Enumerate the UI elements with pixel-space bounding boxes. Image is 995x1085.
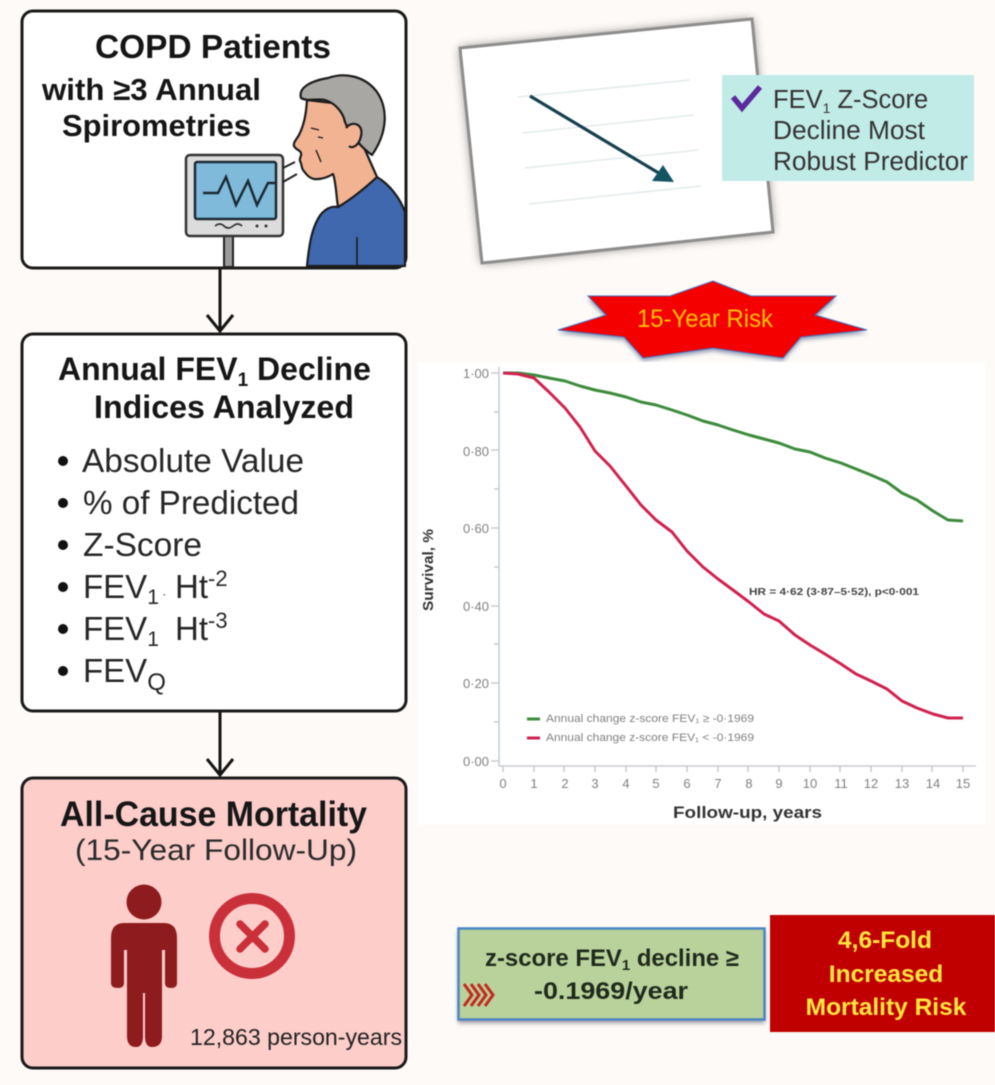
icon: red chevrons <box>464 984 493 1006</box>
text: threshold: 1 <box>622 957 630 974</box>
x-axis labels: 9 <box>775 776 783 791</box>
line: green survival curve <box>503 373 963 521</box>
list: indices: Q <box>147 669 166 696</box>
x-axis labels: 3 <box>591 776 599 791</box>
text: predictor: Z-Score <box>830 86 928 114</box>
list: indices: -3 <box>208 608 228 633</box>
callout: z-score threshold <box>458 928 765 1023</box>
x-axis labels: 15 <box>956 776 970 791</box>
arrow: decline trend <box>530 96 674 182</box>
subheading: follow-up: (15-Year Follow-Up) <box>75 834 357 867</box>
y-axis labels: 0·20 <box>463 676 489 691</box>
x-axis labels: 10 <box>803 776 817 791</box>
annotation: hazard ratio: HR = 4·62 (3·87–5·52), p<0·001 <box>749 586 919 598</box>
heading: decline indices: Decline <box>248 351 371 387</box>
heading: all-cause mortality: All-Cause Mortality <box>60 795 368 834</box>
heading: COPD patients <box>41 28 331 143</box>
text: predictor <box>773 86 969 176</box>
legend: Annual change z-score FEV₁ < -0·1969 <box>546 732 754 744</box>
x-axis labels: 14 <box>926 776 940 791</box>
legend <box>527 713 754 744</box>
callout: increased mortality risk: Mortality Risk <box>806 994 967 1021</box>
x-axis labels: 4 <box>622 776 630 791</box>
list: indices: -2 <box>208 566 228 591</box>
callout: increased mortality risk: Increased <box>829 961 943 988</box>
list: indices: Ht <box>175 610 208 647</box>
text: threshold: -0.1969/year <box>534 978 688 1005</box>
heading: decline indices <box>58 351 371 425</box>
panel: annual FEV1 decline indices <box>22 334 406 711</box>
text: predictor: Decline Most <box>773 117 925 145</box>
arrow: indices to mortality <box>207 711 233 775</box>
badge: 15-year risk: 15-Year Risk <box>637 305 773 333</box>
text: predictor: FEV <box>773 86 823 114</box>
list: indices: % of Predicted <box>83 484 299 521</box>
panel: all-cause mortality <box>22 778 406 1068</box>
line: red survival curve <box>503 373 963 718</box>
axis title: follow-up: Follow-up, years <box>673 803 822 822</box>
icon: cross in circle <box>214 898 290 974</box>
arrow: patients to indices <box>207 268 233 331</box>
panel: declining FEV1 card <box>460 19 773 263</box>
list: indices: FEV <box>83 568 147 605</box>
heading: COPD patients: Spirometries <box>62 108 251 143</box>
heading: COPD patients: COPD Patients <box>95 28 331 65</box>
list: indices: Absolute Value <box>82 442 304 479</box>
y-axis labels <box>463 366 489 769</box>
icon: spirometer monitor <box>186 155 297 267</box>
y-axis labels: 0·60 <box>463 521 489 536</box>
badge: 15-year risk <box>558 281 867 361</box>
x-axis labels: 7 <box>714 776 722 791</box>
callout: most robust predictor <box>722 75 974 181</box>
callout: increased mortality risk: 4,6-Fold <box>838 927 932 954</box>
list: indices: FEV <box>83 610 147 647</box>
y-axis labels: 0·40 <box>463 599 489 614</box>
heading: decline indices: Annual FEV <box>58 351 238 387</box>
x-axis labels: 8 <box>745 776 753 791</box>
heading: decline indices: Indices Analyzed <box>94 389 354 425</box>
icon: person <box>111 884 177 1047</box>
text: predictor: 1 <box>823 100 831 116</box>
text: threshold: z-score FEV <box>485 945 622 972</box>
text: predictor: Robust Predictor <box>773 148 969 176</box>
y-axis labels: 0·80 <box>463 444 489 459</box>
x-axis labels: 13 <box>895 776 909 791</box>
x-axis labels: 6 <box>683 776 691 791</box>
axes <box>491 367 976 772</box>
y-axis labels: 1·00 <box>463 366 489 381</box>
chart: survival curves <box>418 362 985 825</box>
text: person-years: 12,863 person-years <box>190 1024 402 1050</box>
list: indices: FEV <box>83 652 147 689</box>
icon: check mark <box>733 87 760 108</box>
list: indices: · <box>159 587 170 601</box>
panel: COPD patients <box>22 11 406 268</box>
x-axis labels: 11 <box>834 776 848 791</box>
x-axis labels <box>499 776 970 791</box>
heading: decline indices: 1 <box>238 370 249 391</box>
x-axis labels: 0 <box>499 776 507 791</box>
axis title: survival: Survival, % <box>420 529 437 611</box>
text: threshold <box>485 945 739 1005</box>
x-axis labels: 12 <box>864 776 878 791</box>
text: threshold: decline ≥ <box>630 945 739 972</box>
icon: patient breathing <box>294 75 405 267</box>
x-axis labels: 2 <box>561 776 569 791</box>
x-axis labels: 5 <box>652 776 660 791</box>
callout: increased mortality risk <box>770 915 995 1032</box>
list: indices: Z-Score <box>83 526 202 563</box>
y-axis labels: 0·00 <box>463 754 489 769</box>
legend: Annual change z-score FEV₁ ≥ -0·1969 <box>546 713 754 725</box>
x-axis labels: 1 <box>530 776 538 791</box>
list: indices: Ht <box>175 568 208 605</box>
list: indices: 1 <box>147 586 159 609</box>
heading: COPD patients: with ≥3 Annual <box>41 72 261 107</box>
list: indices <box>58 442 304 696</box>
list: indices: 1 <box>147 628 159 651</box>
